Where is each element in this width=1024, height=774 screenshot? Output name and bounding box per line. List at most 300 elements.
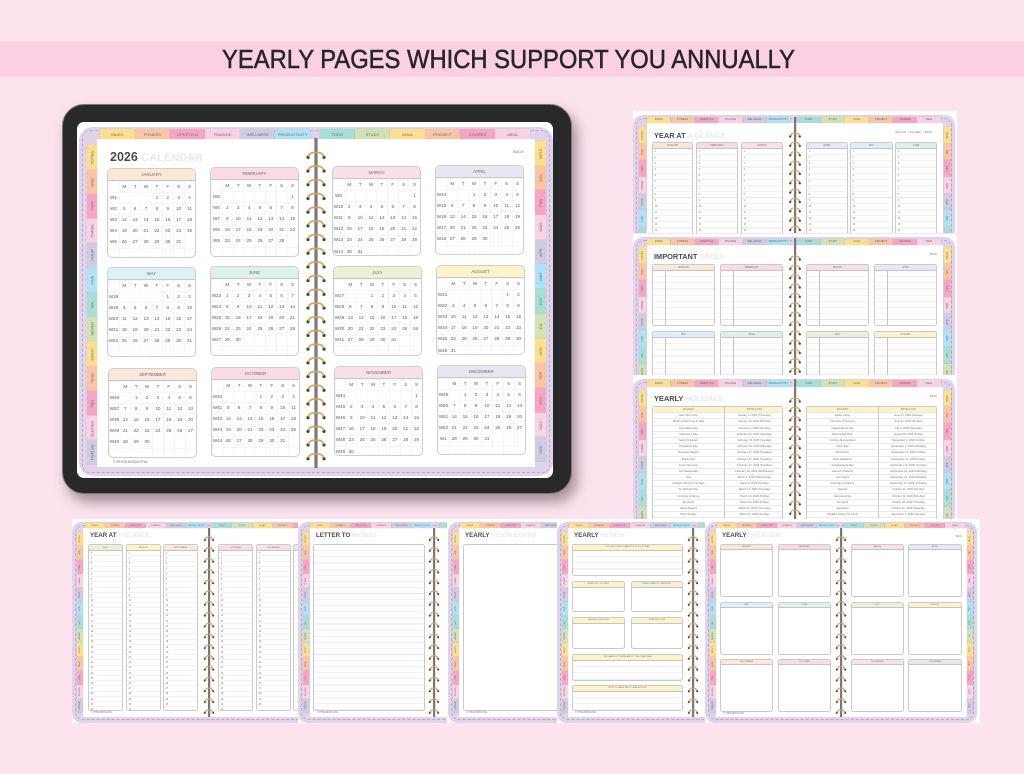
calendar: January: 30 bbox=[165, 239, 170, 244]
side tabs: FIVE bbox=[712, 606, 714, 611]
side tabs: THREE bbox=[641, 444, 644, 453]
spread: Yearly Overview: SEP bbox=[969, 662, 971, 666]
calendar: June: 20 bbox=[279, 315, 284, 320]
month column: January: JANUARY bbox=[667, 144, 678, 147]
calendar: September: M bbox=[123, 384, 127, 388]
calendar: November: W46 bbox=[336, 415, 345, 420]
calendar: November: 7 bbox=[404, 404, 407, 409]
calendar: November bbox=[334, 366, 423, 456]
spread: Yearly Overview: PROJECT bbox=[910, 524, 920, 526]
holiday table right: Grandparents Day bbox=[832, 464, 853, 467]
calendar: May: W bbox=[144, 282, 148, 288]
side tabs: TWO bbox=[641, 286, 644, 292]
card: August: AUGUST bbox=[900, 333, 911, 336]
side tabs right: APR bbox=[538, 248, 543, 256]
calendar: June: 4 bbox=[259, 293, 261, 298]
calendar: August: W32 bbox=[438, 303, 447, 308]
calendar: May: 10 bbox=[187, 305, 192, 310]
side tabs: NINE bbox=[455, 662, 457, 667]
side tabs bbox=[302, 532, 310, 714]
month column: February: FEBRUARY bbox=[710, 144, 724, 147]
top tabs: WELLNESS bbox=[801, 524, 813, 526]
calendar: September: 16 bbox=[144, 417, 150, 422]
card: June: JUNE bbox=[748, 333, 755, 336]
side tabs: ONE bbox=[641, 269, 644, 275]
holiday table left: March 17, 2026 (Tuesday) bbox=[739, 488, 770, 491]
holiday table left: Palm Sunday bbox=[680, 513, 696, 516]
month column: June bbox=[895, 142, 937, 262]
calendar: June: W26 bbox=[212, 326, 221, 331]
month column: April bbox=[806, 142, 848, 262]
calendar: January: T bbox=[134, 184, 137, 188]
calendar: February: 21 bbox=[279, 227, 284, 232]
calendar: January: W bbox=[144, 184, 148, 188]
calendar: July: 10 bbox=[391, 304, 396, 309]
calendar: January: 13 bbox=[133, 217, 138, 222]
top tabs: FINANCE bbox=[151, 524, 160, 526]
calendar: December: F bbox=[496, 380, 499, 386]
spread: Yearly Holidays: PROJECT bbox=[875, 382, 887, 385]
spread: Yearly Holidays: FEB bbox=[946, 429, 949, 434]
calendar: October: W bbox=[248, 382, 252, 388]
side tabs: ONE bbox=[641, 149, 644, 155]
holiday table right: Yom Kippur bbox=[836, 476, 849, 479]
calendar: November: 11 bbox=[371, 415, 375, 420]
calendar: February: 4 bbox=[248, 205, 250, 210]
calendar: July: 28 bbox=[359, 337, 364, 342]
calendar: December: 11 bbox=[495, 403, 500, 408]
spread: Year at a Glance January to June: GOAL bbox=[853, 118, 861, 121]
side tabs: THREE bbox=[79, 577, 81, 584]
calendar: May: 20 bbox=[144, 327, 149, 332]
calendar: July: 3 bbox=[393, 293, 395, 298]
month column: August bbox=[126, 544, 161, 711]
calendar: February: 5 bbox=[259, 205, 261, 210]
calendar: July: M bbox=[348, 282, 352, 286]
calendar: November: NOVEMBER bbox=[366, 370, 391, 375]
side tabs: ONE bbox=[305, 551, 307, 555]
top tabs right: STUDY bbox=[366, 132, 379, 136]
calendar: May: 12 bbox=[133, 316, 138, 321]
holiday table left: New Year's Day bbox=[679, 414, 698, 417]
spread: Year at a Glance January to June: BETA bbox=[946, 132, 949, 139]
spiral binding bbox=[204, 528, 214, 717]
calendar: October: 10 bbox=[280, 405, 285, 410]
calendar: February: F bbox=[269, 182, 272, 188]
top tabs: WELLNESS bbox=[655, 524, 667, 526]
side tabs: FIVE bbox=[79, 606, 81, 611]
calendar: February: 16 bbox=[225, 227, 230, 232]
calendar: July: 27 bbox=[348, 337, 353, 342]
calendar: September: 7 bbox=[124, 406, 127, 411]
side tabs left: FIVE bbox=[90, 276, 94, 285]
calendar: October: 19 bbox=[226, 427, 231, 432]
side tabs: TWELVE bbox=[305, 702, 307, 710]
calendar: April bbox=[435, 165, 524, 255]
spread: Yearly Holidays bbox=[633, 375, 957, 519]
calendar: June: 29 bbox=[225, 337, 230, 342]
calendar: April: 3 bbox=[495, 192, 497, 197]
calendar: July: 13 bbox=[348, 315, 353, 320]
calendar: July: W28 bbox=[335, 304, 344, 309]
calendar: December: 28 bbox=[452, 436, 457, 441]
calendar: September: 22 bbox=[134, 428, 139, 433]
calendar: December: M bbox=[452, 380, 456, 386]
side tabs: FOUR bbox=[641, 198, 644, 206]
card: June bbox=[778, 602, 831, 654]
calendar: December: DECEMBER bbox=[469, 369, 494, 374]
spread: Yearly Overview: GOAL bbox=[891, 524, 897, 526]
top tabs: PRODUCTIVITY bbox=[414, 524, 430, 526]
calendar: July: 22 bbox=[370, 326, 375, 331]
month column: June: JUNE bbox=[913, 144, 919, 147]
calendar: November: 27 bbox=[392, 437, 397, 442]
calendar: November: 19 bbox=[381, 426, 386, 431]
side tabs bbox=[638, 126, 646, 233]
calendar: December: 9 bbox=[475, 403, 477, 408]
side tabs: NINE bbox=[305, 662, 307, 667]
top tabs bbox=[646, 116, 790, 124]
top tabs bbox=[310, 522, 432, 528]
calendar: October: 24 bbox=[280, 427, 285, 432]
holiday table right: September 13, 2026 (Sunday) bbox=[890, 464, 926, 467]
spread: Yearly Holidays: TODO bbox=[805, 382, 813, 385]
calendar: September: 3 bbox=[157, 395, 159, 400]
calendar: March: 19 bbox=[379, 226, 384, 231]
month column: December bbox=[293, 544, 328, 711]
spread: Yearly Overview: MAY bbox=[969, 606, 971, 611]
calendar: June: W25 bbox=[212, 315, 221, 320]
calendar: January: W1 bbox=[110, 195, 117, 200]
calendar: March: 24 bbox=[358, 237, 363, 242]
calendar: May: MAY bbox=[147, 271, 156, 276]
calendar: April: 20 bbox=[450, 225, 455, 230]
calendar: August: 11 bbox=[462, 314, 467, 319]
side tabs right: JUL bbox=[538, 323, 543, 330]
calendar: February: W6 bbox=[213, 205, 220, 210]
calendar: February: 24 bbox=[236, 238, 241, 243]
side tabs: NINE bbox=[79, 662, 81, 667]
card: May: MAY bbox=[744, 604, 749, 606]
calendar: January: W4 bbox=[110, 228, 117, 233]
calendar: November: 12 bbox=[381, 415, 386, 420]
calendar: December: 29 bbox=[463, 436, 468, 441]
calendar: January: 21 bbox=[144, 228, 149, 233]
side tabs: FIVE bbox=[641, 216, 644, 222]
calendar: May: T bbox=[134, 282, 137, 288]
calendar: December: 17 bbox=[484, 414, 490, 419]
calendar: March: 13 bbox=[390, 215, 395, 220]
calendar: April: M bbox=[450, 180, 454, 186]
calendar: August: 21 bbox=[494, 325, 499, 330]
holiday table left: Holi bbox=[686, 476, 691, 479]
calendar: January: 23 bbox=[165, 228, 170, 233]
calendar: June: F bbox=[269, 282, 272, 286]
calendar: August: 7 bbox=[496, 303, 498, 308]
side tabs: SIX bbox=[79, 621, 81, 624]
calendar: September: 6 bbox=[189, 395, 192, 400]
calendar: October: T bbox=[238, 382, 241, 388]
top tabs bbox=[568, 522, 692, 528]
calendar: June: 25 bbox=[257, 326, 262, 331]
calendar: June: 26 bbox=[268, 326, 273, 331]
spread: Important Dates: PROJECT bbox=[875, 240, 887, 243]
section: biggest lessons: BIGGEST LESSONS bbox=[588, 619, 609, 621]
holiday table left: February 14, 2026 (Saturday) bbox=[737, 433, 772, 436]
side tabs bbox=[638, 390, 646, 519]
holiday table right: June 21, 2026 (Sunday) bbox=[894, 420, 923, 423]
calendar: August: AUGUST bbox=[471, 269, 490, 274]
calendar: February: 27 bbox=[268, 238, 273, 243]
top tabs: PRODUCTIVITY bbox=[188, 524, 204, 526]
calendar: December: 1 bbox=[464, 392, 466, 397]
calendar: July: 29 bbox=[370, 337, 375, 342]
calendar: March: T bbox=[381, 182, 383, 186]
calendar: September: 28 bbox=[123, 439, 128, 444]
spread: Year at a Glance January to June: FEB bbox=[946, 166, 949, 171]
calendar: August: 22 bbox=[505, 325, 510, 330]
calendar: October: 2 bbox=[271, 394, 273, 399]
month column: February bbox=[696, 142, 738, 262]
calendar: June: 22 bbox=[225, 326, 230, 331]
calendar: April: 14 bbox=[461, 214, 466, 219]
calendar: November: W48 bbox=[336, 437, 345, 442]
calendar: November: T bbox=[383, 382, 385, 386]
side tabs: TEN bbox=[79, 676, 81, 680]
side tabs: TWELVE bbox=[79, 702, 81, 710]
calendar: March: 20 bbox=[390, 226, 395, 231]
section: grateful for bbox=[630, 617, 683, 649]
calendar: February: M bbox=[225, 182, 229, 188]
spread: Year at a Glance January to June bbox=[633, 111, 957, 233]
calendar: August: 15 bbox=[505, 314, 510, 319]
holiday table left: Lunar New Year bbox=[679, 464, 698, 467]
calendar: August: W36 bbox=[438, 348, 447, 353]
top tabs: LIFESTYLE bbox=[700, 382, 713, 385]
section: what I did well bbox=[572, 581, 625, 612]
calendar: June: 30 bbox=[236, 337, 241, 342]
heading: LETTER TO MYSELF bbox=[316, 532, 377, 539]
calendar: December: W52 bbox=[439, 425, 448, 430]
spread: Year at a Glance January to June: CHORES bbox=[900, 118, 911, 121]
calendar: October: S bbox=[292, 382, 295, 388]
card: August: AUGUST bbox=[930, 604, 940, 606]
calendar: September: W bbox=[145, 384, 149, 388]
heading: YEAR AT A GLANCE bbox=[90, 532, 150, 539]
calendar: November: 20 bbox=[392, 426, 397, 431]
side tabs: THREE bbox=[564, 577, 566, 584]
holiday table left: February 16, 2026 (Monday) bbox=[737, 445, 772, 448]
calendar: October: 5 bbox=[227, 405, 230, 410]
calendar: April: 9 bbox=[484, 203, 486, 208]
calendar: November: 8 bbox=[415, 404, 418, 409]
side tabs right: AUG bbox=[538, 347, 543, 355]
top tabs: FITNESS bbox=[110, 524, 120, 526]
calendar: May: S bbox=[177, 282, 180, 288]
spiral binding bbox=[688, 528, 698, 717]
month column: March: 1 2 3 4 5 6 7 8 9 10 11 12 13 14 bbox=[744, 150, 746, 232]
calendar: November: F bbox=[393, 382, 396, 386]
calendar: July: S bbox=[403, 282, 406, 286]
calendar: February: T bbox=[237, 182, 240, 188]
top tabs: PRODUCTIVITY bbox=[769, 240, 788, 243]
calendar: December: T bbox=[486, 380, 488, 386]
calendar: November: 21 bbox=[403, 426, 408, 431]
spread: Important Dates: JUL bbox=[946, 370, 949, 374]
calendar: February: FEBRUARY bbox=[243, 171, 266, 176]
calendar: March: 29 bbox=[412, 237, 417, 242]
calendar: January: 31 bbox=[176, 239, 181, 244]
calendar: February: 13 bbox=[268, 216, 273, 221]
calendar: April: 30 bbox=[482, 236, 488, 241]
month column: August: 1 2 3 4 5 6 7 8 9 10 11 12 13 14 15 16 17 18 19 20 21 22 23 24 25 26 27 28 29 30 31 bbox=[129, 552, 131, 711]
calendar: November: W bbox=[371, 382, 375, 386]
spread: Yearly Holidays: MEAL bbox=[926, 382, 933, 385]
holiday table left: Valentine's Day bbox=[679, 433, 698, 436]
calendar: December: 4 bbox=[497, 392, 499, 397]
calendar: October: 18 bbox=[291, 416, 296, 421]
calendar: January: 4 bbox=[188, 195, 191, 200]
calendar: February: 11 bbox=[247, 216, 251, 221]
calendar: October: 16 bbox=[269, 416, 274, 421]
calendar: August: F bbox=[495, 280, 498, 286]
calendar: August: M bbox=[451, 280, 455, 286]
side tabs left: TWO bbox=[90, 202, 94, 211]
spread: Important Dates: JAN bbox=[946, 270, 949, 274]
calendar: April: 11 bbox=[504, 203, 509, 208]
calendar: March: 27 bbox=[390, 237, 395, 242]
holiday table right: Dussehra bbox=[837, 501, 848, 504]
calendar: October: 28 bbox=[248, 438, 253, 443]
calendar: March: 31 bbox=[358, 249, 363, 254]
side tabs bbox=[710, 532, 716, 714]
calendar: January: 7 bbox=[145, 206, 147, 211]
calendar: August: 31 bbox=[451, 348, 456, 353]
calendar: November: 28 bbox=[403, 437, 408, 442]
spread: Year at a Glance July to December: PROJECT bbox=[278, 524, 288, 526]
holiday table left: Daylight Saving Time Start bbox=[673, 482, 704, 485]
calendar: January: 25 bbox=[187, 228, 192, 233]
spread: Yearly Holidays: BETA bbox=[946, 395, 949, 402]
spread: Important Dates: CHORES bbox=[900, 240, 911, 243]
holiday table left: February 17, 2026 (Tuesday) bbox=[737, 464, 772, 467]
top tabs: FINANCE bbox=[725, 240, 736, 243]
spread: Year at a Glance January to June: MAR bbox=[946, 183, 949, 188]
calendar: September: 21 bbox=[123, 428, 128, 433]
calendar: June: 19 bbox=[268, 315, 273, 320]
spread: Year at a Glance January to June: MAY bbox=[946, 216, 949, 222]
card: August bbox=[908, 602, 962, 654]
section: what I did well: WHAT DID I DO WELL bbox=[587, 583, 610, 585]
top tabs bbox=[646, 380, 790, 388]
top tabs bbox=[646, 238, 790, 246]
calendar: April: S bbox=[505, 180, 508, 186]
calendar: December: 19 bbox=[506, 414, 511, 419]
calendar: January: S bbox=[177, 184, 180, 188]
calendar: August: 2 bbox=[517, 292, 520, 297]
spread: Yearly Overview: JUL bbox=[969, 634, 971, 638]
calendar: December: 14 bbox=[452, 414, 457, 419]
top tabs: FITNESS bbox=[486, 524, 495, 526]
calendar: December: W51 bbox=[439, 414, 448, 419]
card: February bbox=[778, 544, 831, 596]
holiday table right: Labor Day bbox=[836, 445, 849, 448]
calendar: August: 19 bbox=[472, 325, 478, 330]
calendar: January: 28 bbox=[144, 239, 149, 244]
calendar: December: 27 bbox=[517, 425, 522, 430]
calendar: December: 13 bbox=[517, 403, 522, 408]
calendar: April: 19 bbox=[515, 214, 520, 219]
top tabs: FITNESS bbox=[677, 118, 688, 121]
calendar: March: 9 bbox=[348, 215, 351, 220]
calendar: July: W29 bbox=[335, 315, 344, 320]
calendar: May: W22 bbox=[109, 338, 118, 343]
calendar: October: W41 bbox=[213, 405, 222, 410]
top tabs: WELLNESS bbox=[545, 524, 557, 526]
calendar: July: 4 bbox=[403, 293, 406, 298]
spread: Yearly Overview: OCT bbox=[969, 676, 971, 680]
calendar: June: 1 bbox=[226, 293, 229, 298]
calendar: October: 15 bbox=[258, 416, 264, 421]
holiday table right: August 28, 2026 (Friday) bbox=[894, 433, 923, 436]
calendar: May: 4 bbox=[123, 305, 126, 310]
calendar: August: 30 bbox=[516, 336, 521, 341]
side tabs: ONE bbox=[564, 551, 566, 555]
calendar: July: 2 bbox=[382, 293, 384, 298]
section: next year: HOW TO MAKE NEXT YEAR BETTER bbox=[609, 687, 646, 689]
calendar: September: W37 bbox=[110, 406, 119, 411]
calendar: June: 2 bbox=[237, 293, 239, 298]
calendar: March: 14 bbox=[401, 215, 406, 220]
calendar: November: 10 bbox=[360, 415, 365, 420]
calendar: February: 3 bbox=[237, 205, 239, 210]
top tabs: INDEX bbox=[655, 240, 663, 243]
calendar: February: 20 bbox=[268, 227, 273, 232]
card: February: FEBRUARY bbox=[745, 266, 758, 269]
calendar: August: 18 bbox=[462, 325, 467, 330]
spread: Important Dates: APR bbox=[946, 319, 949, 325]
holiday table right: September 14, 2026 (Monday) bbox=[890, 470, 927, 473]
top tabs: LIFESTYLE bbox=[700, 118, 713, 121]
top tabs: INDEX bbox=[723, 524, 730, 526]
calendar: April: F bbox=[494, 180, 497, 186]
calendar: October: 22 bbox=[258, 427, 264, 432]
calendar: November: 16 bbox=[349, 426, 354, 431]
calendar: October: 8 bbox=[260, 405, 262, 410]
calendar: May: 11 bbox=[122, 316, 127, 321]
calendar: November: 22 bbox=[414, 426, 419, 431]
calendar: October: 21 bbox=[248, 427, 253, 432]
calendar: June: 9 bbox=[237, 304, 239, 309]
calendar: February: 8 bbox=[291, 205, 294, 210]
calendar: February: 10 bbox=[236, 216, 241, 221]
calendar: December: W49 bbox=[439, 392, 448, 397]
top tabs: FINANCE bbox=[635, 524, 645, 526]
month column: November: 1 2 3 4 5 6 7 8 9 10 11 12 13 14 15 16 17 18 19 20 21 22 23 24 25 26 27 28 29 30 bbox=[259, 552, 261, 706]
spread: Yearly Overview bbox=[705, 519, 980, 723]
calendar: September: 20 bbox=[188, 417, 193, 422]
calendar: August: 20 bbox=[483, 325, 488, 330]
side tabs: ONE bbox=[641, 412, 644, 418]
top tabs bbox=[716, 522, 838, 528]
calendar: March: 23 bbox=[347, 237, 352, 242]
calendar: January: 9 bbox=[167, 206, 169, 211]
card: May bbox=[652, 331, 715, 393]
calendar: March: W13 bbox=[334, 237, 343, 242]
calendar: January: 11 bbox=[187, 206, 192, 211]
card: October: OCTOBER bbox=[799, 661, 810, 663]
calendar: October: 9 bbox=[271, 405, 273, 410]
